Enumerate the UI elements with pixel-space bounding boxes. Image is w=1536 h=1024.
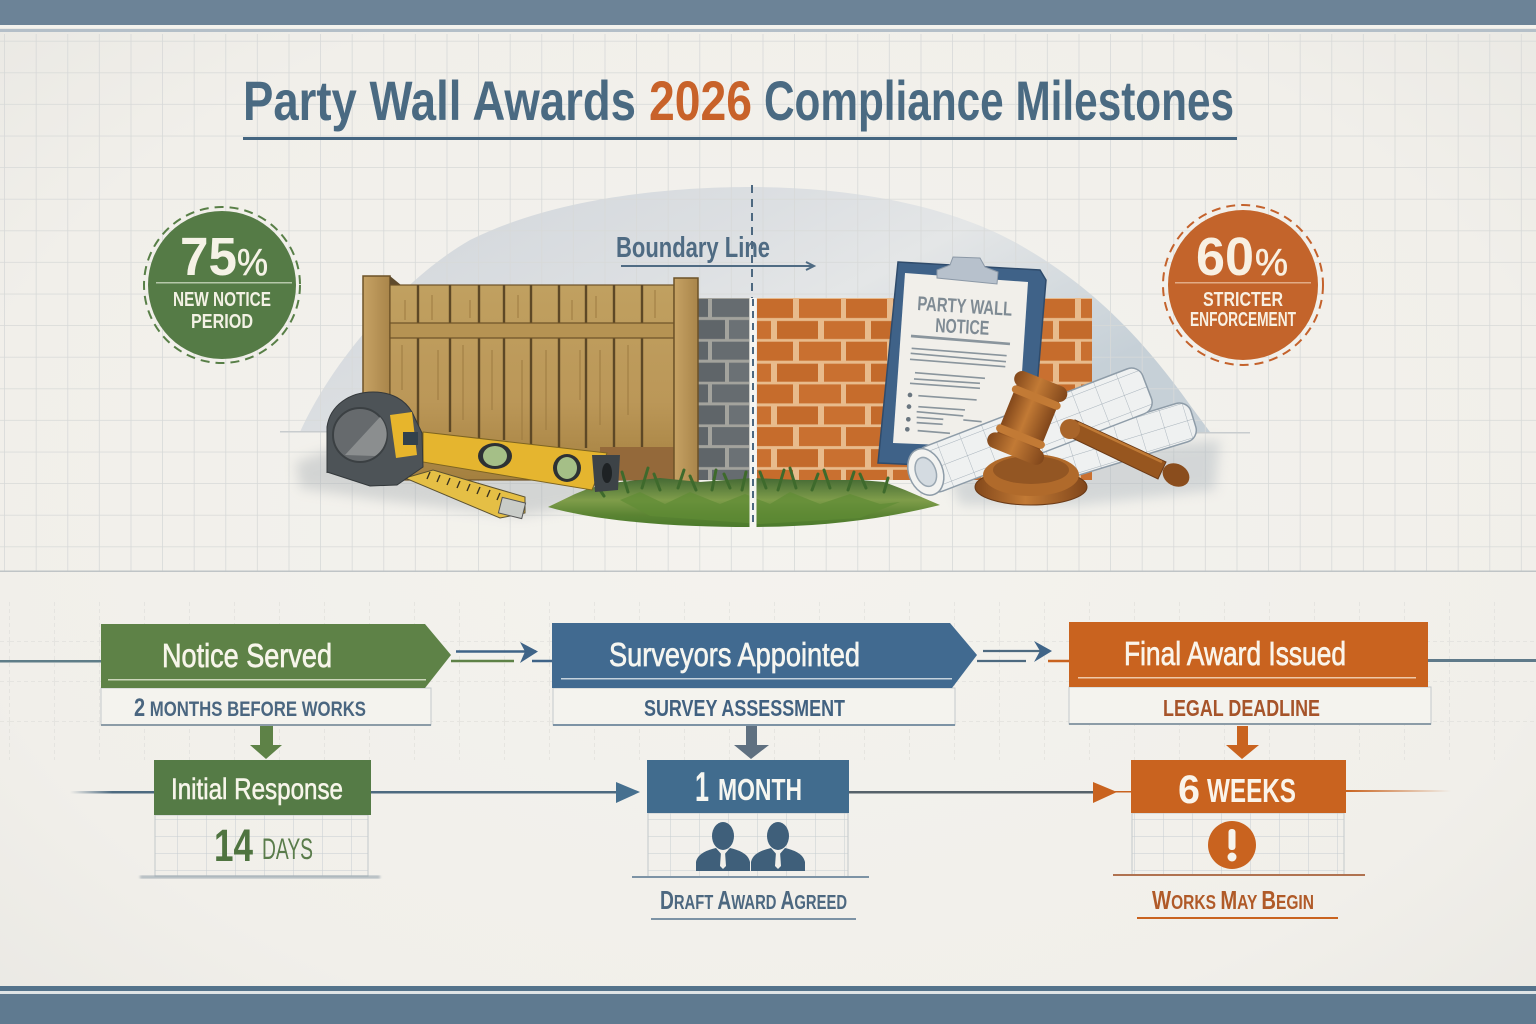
surveyors header [552,623,977,688]
clipboard: party wall notice [878,257,1046,470]
top banner band [0,0,1536,32]
stat badge: 75% new notice period: % [237,242,268,284]
stat badge: 75% new notice period [144,207,300,363]
grass mound [548,468,940,527]
timeline connector: top row left [0,660,101,662]
grey block wall [698,298,752,480]
surveyors header: Surveyors Appointed [609,636,860,673]
notice served sub panel: 2 MONTHS BEFORE WORKS [134,694,366,722]
title [243,69,1237,140]
icon: two surveyors [696,822,805,871]
spirit level [423,432,620,492]
step: initial response: DAYS [262,833,313,866]
boundary dashed line [750,185,756,528]
surveyors sub panel [553,688,955,726]
step: final award issued [1069,622,1431,725]
step: one month [632,760,869,920]
stat badge: 75% new notice period: PERIOD [191,311,253,333]
final award header: Final Award Issued [1124,635,1346,672]
stat badge: 60% stricter enforcement: % [1255,242,1288,284]
down arrow: orange [1226,726,1259,759]
timeline connector: top row right [1428,659,1536,662]
wooden fence [363,276,698,483]
title: Party Wall Awards [243,69,636,132]
step: six weeks [1113,760,1451,919]
arrow: one month to six weeks [849,782,1132,803]
final award sub panel: LEGAL DEADLINE [1163,695,1320,721]
ground shadows [280,431,1250,516]
step: notice served [101,624,451,726]
step: six weeks: WEEKS [1207,772,1296,809]
illustration: party wall scene [280,185,1250,528]
stat badge: 75% new notice period: 75 [180,227,237,287]
stat badge: 60% stricter enforcement: ENFORCEMENT [1190,309,1296,331]
surveyors sub panel: SURVEY ASSESSMENT [644,695,845,721]
arrow: surveyors to final [977,641,1069,662]
section divider [0,570,1536,572]
down arrow: green [250,726,282,759]
arrow: notice to surveyors [451,642,552,663]
illustration backdrop dome [300,187,1210,432]
boundary line label: Boundary Line [616,232,770,264]
step: initial response: 14 [214,820,253,871]
gavel [975,368,1194,505]
stat badge: 60% stricter enforcement: STRICTER [1203,289,1283,311]
step: initial response: Initial Response [171,773,343,806]
stat badge: 60% stricter enforcement: 60 [1196,227,1254,287]
stat badge: 60% stricter enforcement [1163,205,1323,365]
red brick wall [757,298,1092,480]
stat badge: 75% new notice period: NEW NOTICE [173,289,271,311]
notice served header [101,624,451,688]
step: one month: MONTH [718,772,802,807]
draft award agreed: DRAFT AWARD AGREED [660,885,847,915]
step: one month: 1 [695,763,709,810]
notice served header: Notice Served [162,637,332,674]
bottom banner band [0,986,1536,1024]
title: 2026 [649,69,752,132]
rolled plans [901,365,1199,500]
title: Compliance Milestones [764,69,1234,132]
works may begin: WORKS MAY BEGIN [1152,885,1314,915]
arrow: response to one month [371,782,640,803]
tape measure [327,392,526,519]
step: six weeks: 6 [1178,768,1200,812]
down arrow: slate [734,726,769,759]
notice served sub panel [101,688,431,726]
icon: warning [1208,821,1256,869]
clipboard: party wall notice: PARTY WALL [917,293,1013,321]
step: surveyors appointed [552,623,977,726]
final award sub panel [1069,687,1431,725]
final award header [1069,622,1428,687]
step: initial response [70,760,380,878]
clipboard: party wall notice: NOTICE [935,315,990,340]
